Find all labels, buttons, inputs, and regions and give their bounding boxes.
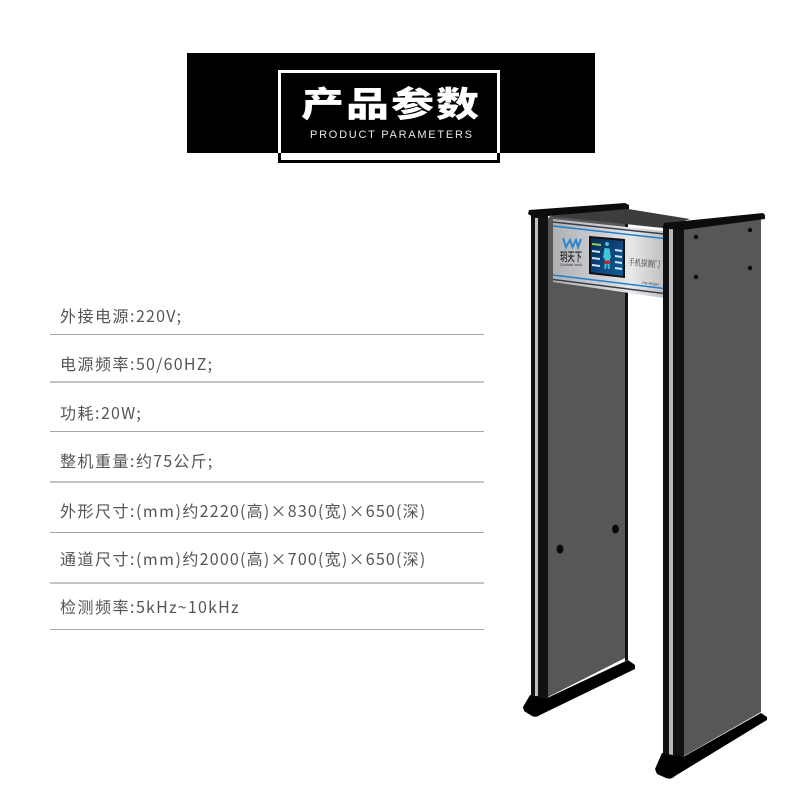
black banner block [187, 53, 595, 153]
parameter: weight: 整机重量:约75公斤; [60, 448, 213, 472]
touch screen [589, 236, 625, 278]
plate stripes [553, 222, 664, 234]
parameter list [50, 303, 484, 630]
parameter: outer dimensions: 外形尺寸:(mm)约2220(高)×830(宽)×650(深) [60, 498, 426, 522]
header banner [187, 53, 595, 163]
body figure [603, 242, 611, 269]
parameter: channel dimensions: 通道尺寸:(mm)约2000(高)×700(宽)×650(深) [60, 546, 426, 570]
subtitle: PRODUCT PARAMETERS [310, 129, 474, 141]
left holes [556, 544, 564, 554]
parameter: detection frequency: 检测频率:5kHz~10kHz [60, 594, 240, 618]
parameter: power consumption: 功耗:20W; [60, 400, 142, 424]
right top cap [663, 213, 765, 230]
logo: Contintal Insult [560, 263, 582, 267]
front plate: PK-P6SH [642, 281, 660, 287]
plate label: 手机探测门 [628, 255, 661, 271]
top beam [548, 209, 690, 228]
right pillar body [663, 225, 684, 760]
logo [560, 238, 582, 267]
right holes [694, 235, 698, 239]
logo: 玥天下 [560, 248, 582, 265]
right base [655, 713, 767, 779]
left top cap [528, 203, 629, 217]
title: 产品参数 [301, 77, 481, 127]
title frame [278, 70, 500, 163]
front plate [553, 219, 664, 298]
right panel [684, 219, 761, 756]
left base [523, 660, 635, 717]
left inner panel [548, 209, 625, 697]
parameter: external power: 外接电源:220V; [60, 303, 182, 327]
parameter: power frequency: 电源频率:50/60HZ; [60, 351, 213, 375]
right pillar [655, 213, 767, 779]
left pillar [523, 203, 635, 717]
left pillar body [531, 214, 548, 700]
